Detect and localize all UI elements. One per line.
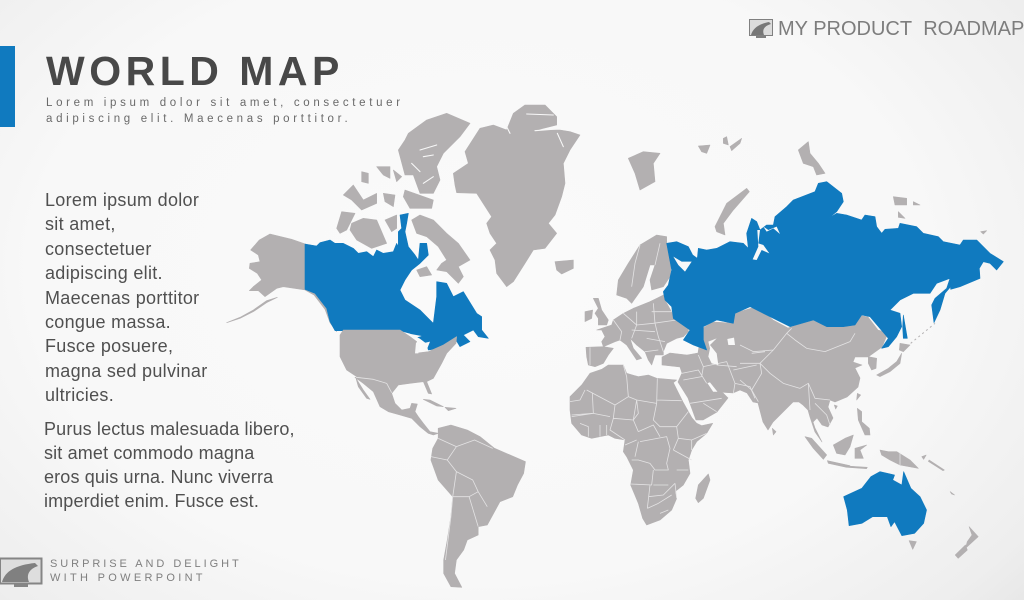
south america and oceania — [431, 425, 978, 587]
europe and the middle east — [585, 293, 757, 412]
europe borders — [590, 303, 677, 365]
footer brand text: WITH POWERPOINT — [50, 572, 206, 584]
tasmania — [909, 541, 916, 549]
text block: first paragraph: Fusce posuere, — [45, 336, 173, 356]
white sea and siberian gulfs — [673, 227, 780, 272]
subtitle: Lorem ipsum dolor sit amet, consectetuer — [46, 97, 404, 109]
great lakes — [407, 333, 430, 353]
north america and arctic — [227, 105, 580, 350]
usa, mexico and caribbean — [340, 330, 457, 435]
ellesmere fjords — [412, 145, 437, 183]
footer brand text: SURPRISE AND DELIGHT — [50, 558, 242, 570]
text block: first paragraph: adipiscing elit. — [45, 263, 163, 283]
text block: second paragraph: sit amet commodo magna — [44, 443, 254, 463]
caspian, aral and black sea — [708, 338, 735, 365]
text block: first paragraph: Lorem ipsum dolor — [45, 190, 199, 210]
australia — [844, 472, 927, 536]
iceland — [555, 260, 573, 274]
africa borders — [570, 365, 707, 513]
asia — [662, 308, 888, 442]
britain — [593, 298, 608, 325]
japan — [877, 343, 910, 377]
text block: first paragraph: sit amet, — [45, 214, 116, 234]
south america — [431, 425, 525, 587]
ireland — [585, 310, 593, 322]
scandinavia borders — [632, 243, 660, 287]
russia — [663, 182, 1003, 350]
aral sea — [727, 338, 735, 345]
scandinavia — [617, 235, 672, 303]
new zealand — [950, 492, 978, 558]
footer brand text — [50, 558, 242, 584]
alaska — [227, 234, 337, 332]
korea — [868, 357, 877, 370]
text block: first paragraph — [45, 190, 208, 405]
spain — [586, 347, 613, 367]
header brand text: MY PRODUCT ROADMAP — [778, 18, 1024, 40]
usa — [340, 330, 457, 394]
text block: second paragraph: imperdiet enim. Fusce est. — [44, 491, 259, 511]
east and southeast asia details — [740, 323, 935, 468]
scandinavia and arctic islands — [617, 137, 1003, 350]
canada — [305, 213, 488, 350]
kamchatka — [932, 278, 951, 323]
arctic russian islands — [628, 137, 987, 235]
madagascar — [696, 474, 710, 503]
middle east borders — [682, 355, 757, 412]
greenland — [453, 105, 580, 287]
text block: first paragraph: magna sed pulvinar — [45, 361, 208, 381]
subtitle: adipiscing elit. Maecenas porttitor. — [46, 113, 351, 125]
icon: footer logo — [0, 558, 42, 587]
sakhalin — [903, 315, 907, 338]
icon: header logo — [749, 19, 773, 38]
africa — [570, 365, 713, 525]
asia borders — [740, 328, 855, 425]
title: WORLD MAP — [46, 48, 344, 94]
text block: first paragraph: ultricies. — [45, 385, 114, 405]
text block: first paragraph: consectetuer — [45, 239, 152, 259]
accent bar — [0, 46, 15, 127]
south america borders — [431, 438, 493, 560]
canadian arctic islands — [337, 113, 470, 283]
africa continent — [570, 365, 713, 525]
melanesian islands — [847, 455, 944, 471]
cuba and hispaniola — [423, 399, 456, 411]
kuril islands — [911, 323, 935, 343]
text block: second paragraph: Purus lectus malesuada libero, — [44, 419, 295, 439]
caspian sea — [708, 338, 718, 365]
text block: second paragraph — [44, 419, 295, 511]
subtitle — [46, 97, 404, 125]
mainland europe — [597, 293, 688, 365]
text block: second paragraph: eros quis urna. Nunc viverra — [44, 467, 273, 487]
indonesia and philippines — [772, 393, 870, 467]
greenland fjords — [503, 114, 563, 147]
new guinea — [880, 450, 918, 468]
text block: first paragraph: Maecenas porttitor — [45, 288, 199, 308]
mexico and central america — [355, 377, 438, 435]
usa mexico border — [356, 377, 392, 393]
new guinea border — [899, 453, 901, 465]
text block: first paragraph: congue massa. — [45, 312, 171, 332]
